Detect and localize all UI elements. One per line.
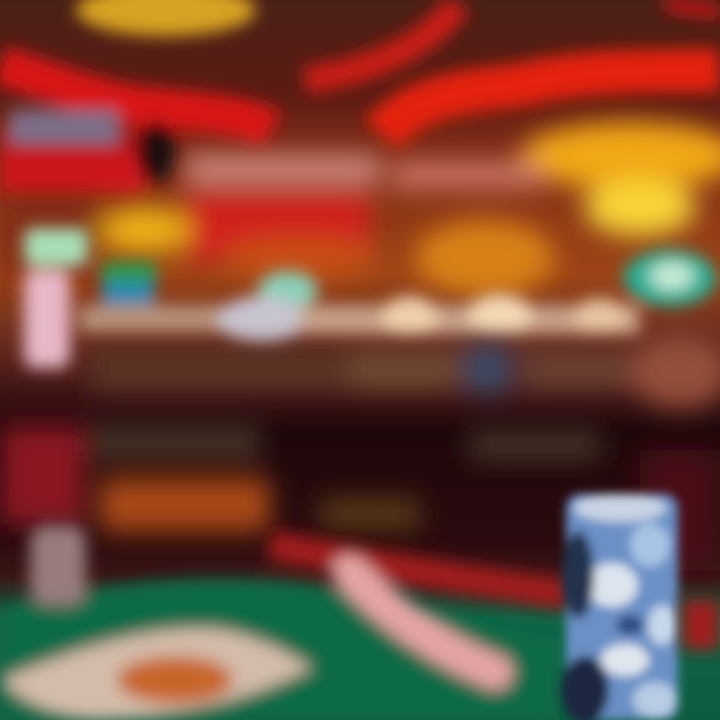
- red table edge at right: [682, 600, 720, 650]
- coloured signs and mid-level bright band: [24, 228, 716, 368]
- table, red rail and pink marking: [0, 525, 570, 720]
- ceiling lights and red arcs: [0, 0, 720, 194]
- glowing chandelier and pale bands: [0, 122, 720, 296]
- dark bar area: [0, 336, 720, 570]
- stack of blue and white chips: [561, 494, 678, 720]
